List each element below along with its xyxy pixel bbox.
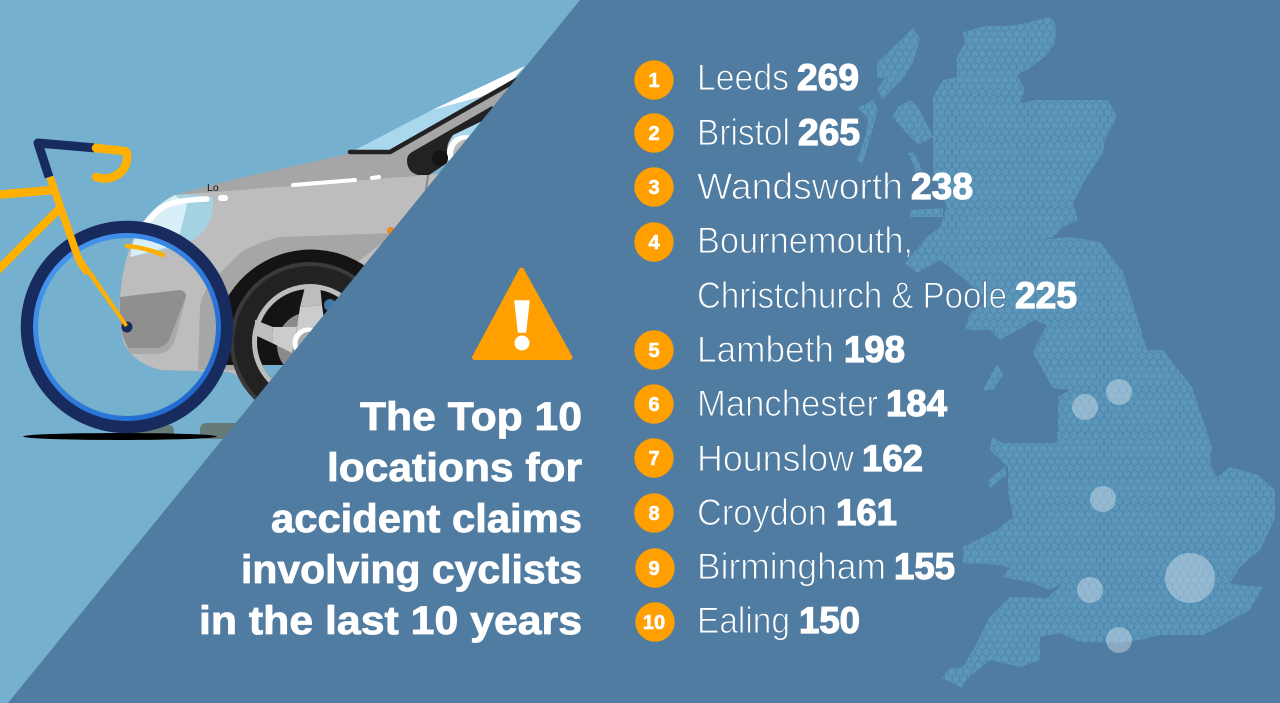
row 8: Croydon <box>634 492 897 533</box>
bicycle shadow <box>23 433 217 440</box>
row 8: Croydon: 161 <box>836 492 897 533</box>
row 1: Leeds: 269 <box>797 57 859 98</box>
row 6: Manchester: 184 <box>886 383 947 424</box>
city markers <box>1072 379 1215 653</box>
row 7: Hounslow: 162 <box>862 438 923 479</box>
title: The Top 10 <box>360 395 582 439</box>
row 3: Wandsworth: 238 <box>911 166 973 207</box>
row 3: Wandsworth: Wandsworth <box>697 166 903 207</box>
window behind mirror <box>447 118 510 165</box>
row 6: Manchester: Manchester <box>697 383 878 424</box>
car illustration <box>119 66 540 422</box>
row 2: Bristol: Bristol <box>697 112 790 153</box>
door mirror <box>407 106 497 175</box>
title: accident claims <box>271 497 582 541</box>
row 7: Hounslow: Hounslow <box>697 438 854 479</box>
title: locations for <box>327 446 582 490</box>
road marks <box>120 423 280 439</box>
row 10: Ealing: 10 <box>643 612 665 634</box>
title: involving cyclists <box>241 548 582 592</box>
row 9: Birmingham: 9 <box>648 558 660 580</box>
row 8: Croydon: 8 <box>648 503 660 525</box>
title: in the last 10 years <box>199 599 582 643</box>
row 4: Bournemouth, Christchurch & Poole: Bournemouth, <box>697 220 913 261</box>
row 1: Leeds: Leeds <box>697 57 789 98</box>
row 9: Birmingham: Birmingham <box>697 546 886 587</box>
UK hexagon map <box>840 0 1280 703</box>
ranked list <box>634 57 1077 642</box>
row 4: Bournemouth, Christchurch & Poole: 4 <box>648 232 660 254</box>
icon: warning triangle <box>474 270 570 358</box>
row 2: Bristol: 265 <box>798 112 860 153</box>
row 5: Lambeth <box>634 329 905 370</box>
bicycle <box>0 143 227 440</box>
front tyre <box>230 262 356 400</box>
row 5: Lambeth: 5 <box>648 340 660 362</box>
row 10: Ealing: Ealing <box>697 600 790 641</box>
row 2: Bristol <box>634 112 860 153</box>
row 1: Leeds: 1 <box>648 70 660 92</box>
bicycle wheel <box>27 227 227 427</box>
row 4: Bournemouth, Christchurch & Poole: Christchurch & Poole <box>697 275 1007 316</box>
row 7: Hounslow <box>634 438 923 479</box>
row 9: Birmingham: 155 <box>894 546 955 587</box>
bicycle frame <box>0 143 163 327</box>
row 5: Lambeth: 198 <box>844 329 905 370</box>
row 10: Ealing <box>635 600 860 642</box>
row 4: Bournemouth, Christchurch & Poole <box>634 220 1077 316</box>
row 7: Hounslow: 7 <box>648 448 660 470</box>
row 9: Birmingham <box>635 546 955 588</box>
row 10: Ealing: 150 <box>799 600 860 641</box>
row 4: Bournemouth, Christchurch & Poole: 225 <box>1015 275 1077 316</box>
row 3: Wandsworth: 3 <box>648 177 660 199</box>
stray label on car: Lo <box>207 182 219 194</box>
row 5: Lambeth: Lambeth <box>697 329 834 370</box>
row 3: Wandsworth <box>634 166 973 207</box>
row 6: Manchester: 6 <box>648 394 660 416</box>
row 2: Bristol: 2 <box>648 123 660 145</box>
row 6: Manchester <box>634 383 947 424</box>
row 8: Croydon: Croydon <box>697 492 827 533</box>
title <box>199 395 582 643</box>
row 1: Leeds <box>634 57 859 100</box>
